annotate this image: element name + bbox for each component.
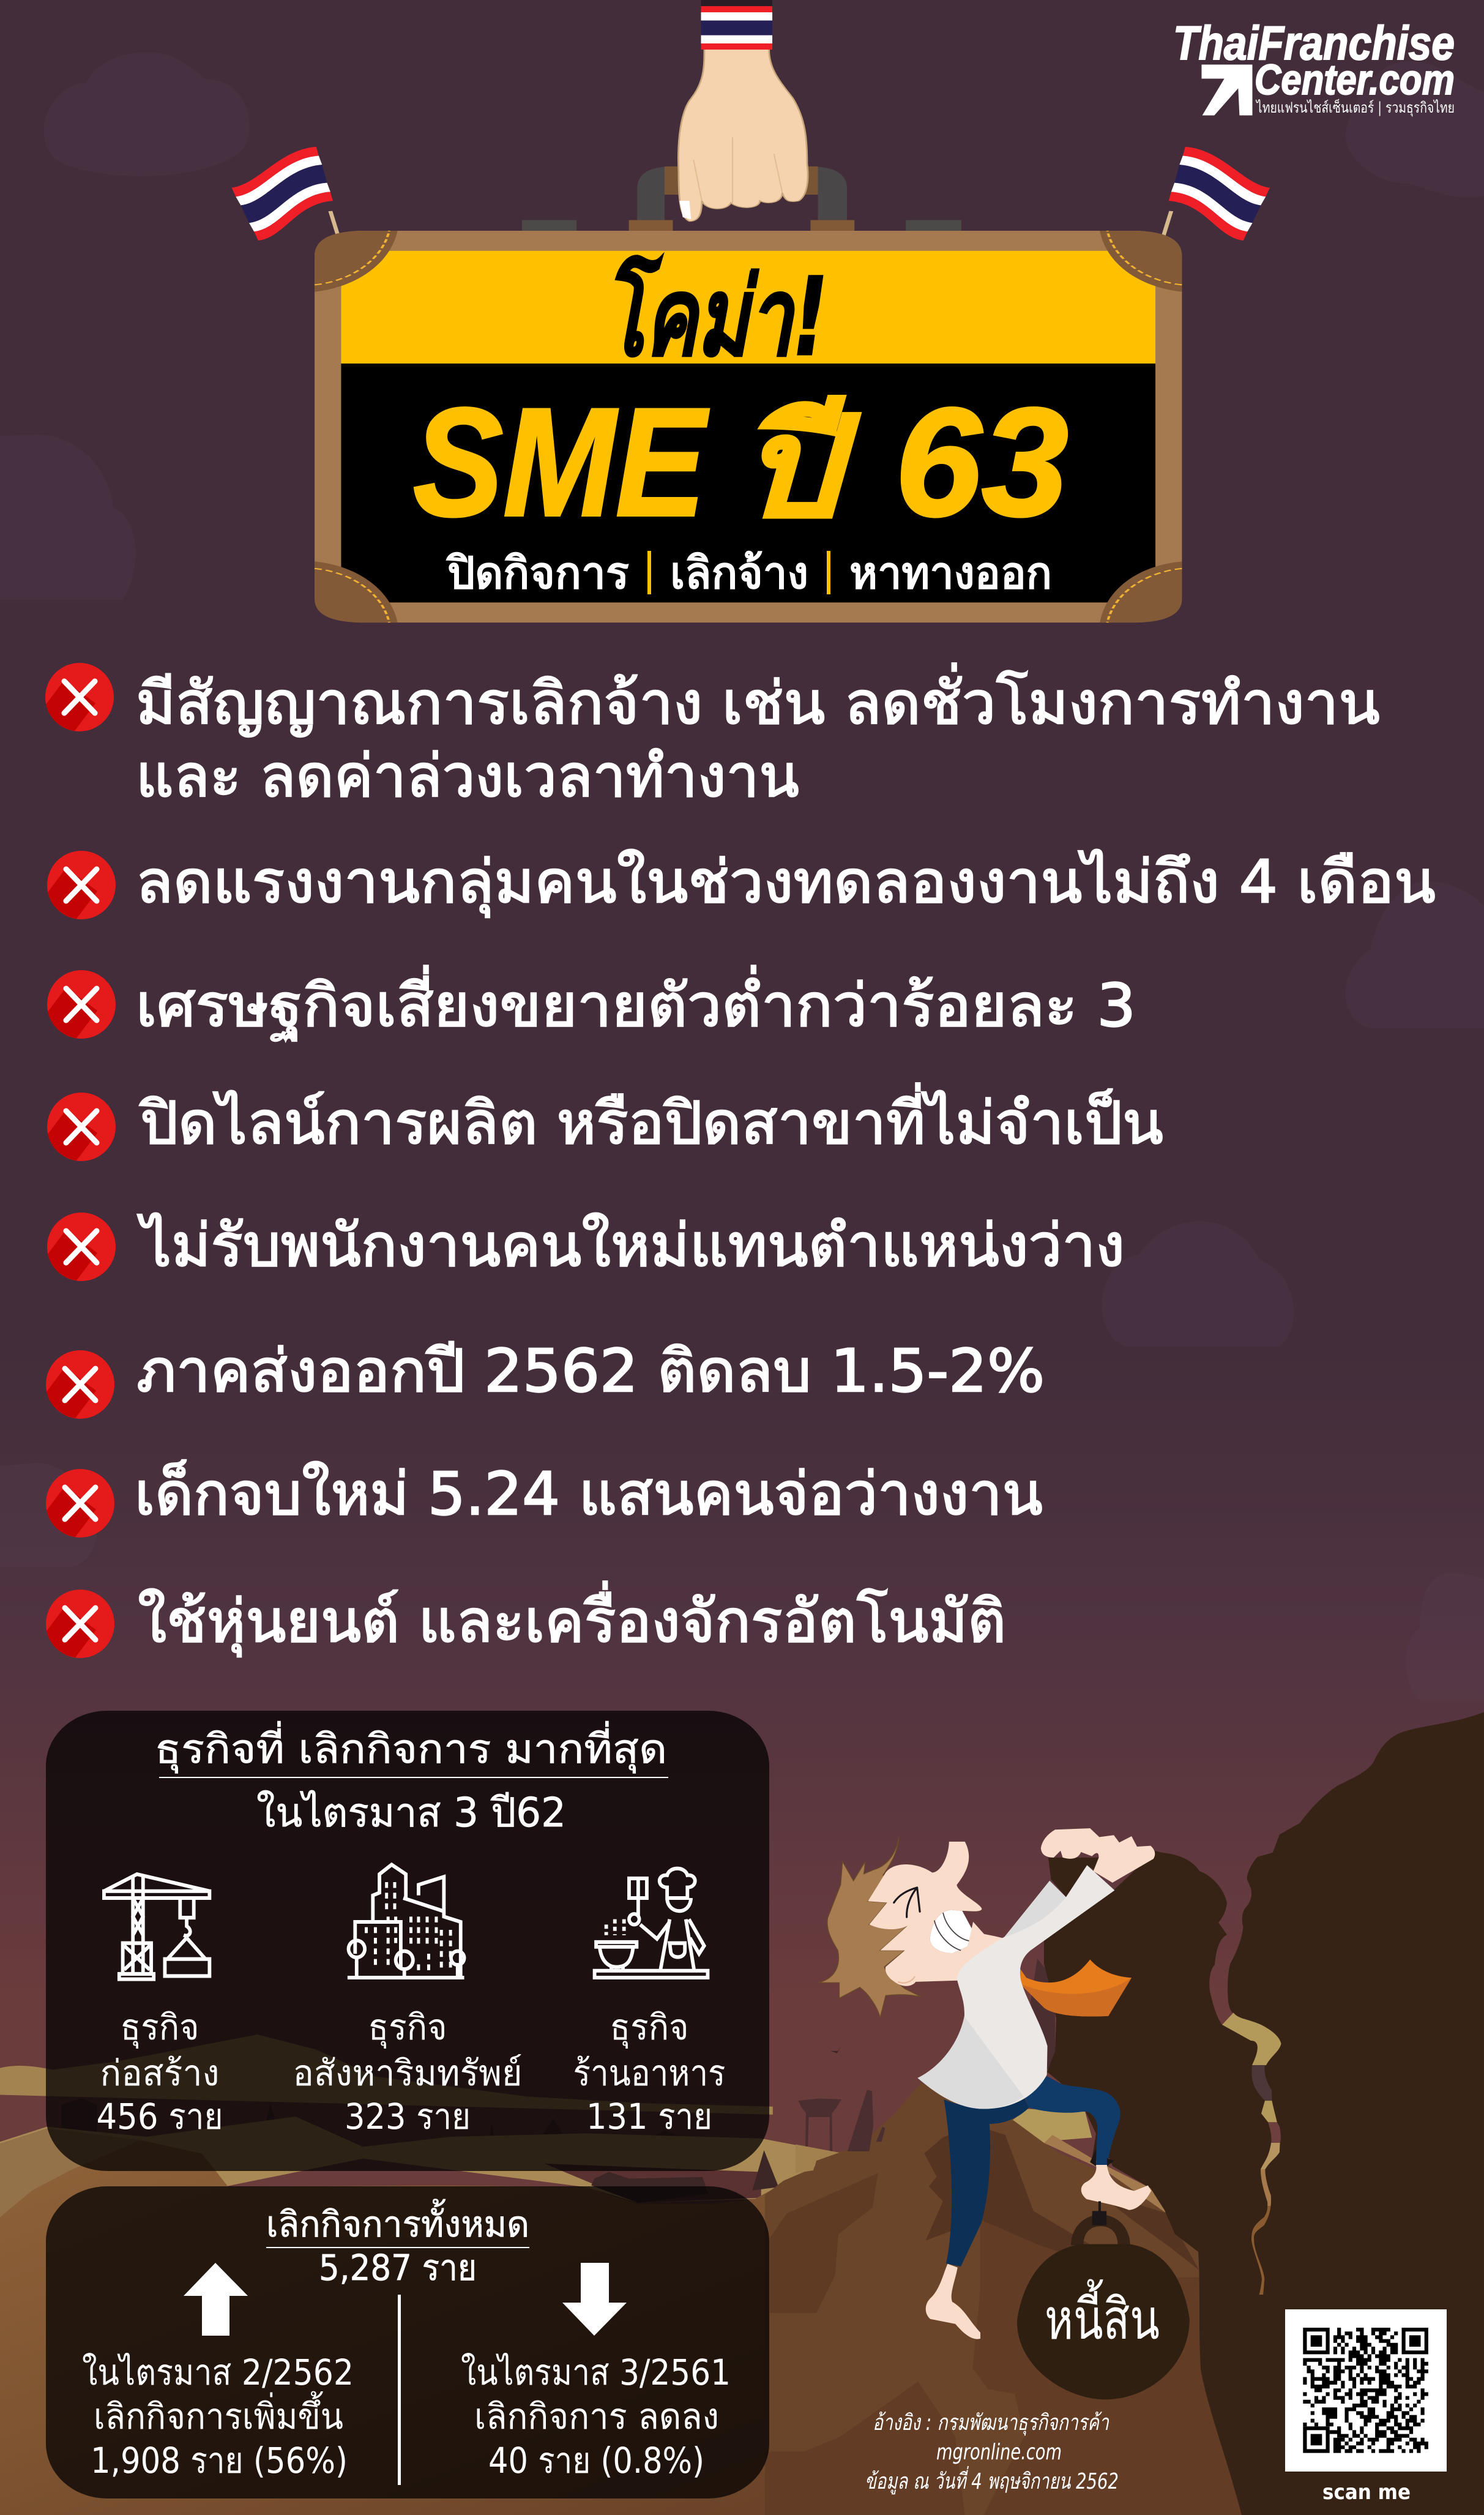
tan ledge: [796, 2145, 839, 2173]
quarter 2 figures: 1,908 ราย (56%): [91, 2440, 348, 2481]
arrow up: [184, 2263, 248, 2336]
icon: flag right: [1163, 147, 1270, 241]
panel heading: ธุรกิจที่ เลิกกิจการ มากที่สุด: [155, 1721, 667, 1774]
crack tail: [1249, 2289, 1264, 2315]
total heading: 5,287 ราย: [319, 2247, 477, 2289]
pocket temple: [591, 2150, 778, 2203]
suitcase subtitle: หาทางออก: [849, 547, 1052, 599]
shirt shading: [918, 1881, 1066, 2109]
suitcase headline: ปี: [740, 387, 860, 548]
landscape hills: [0, 2035, 960, 2515]
column: restaurants: 131 ราย: [586, 2096, 712, 2137]
item 5: ไม่รับพนักงานคนใหม่แทนตำแหน่งว่าง: [137, 1211, 1125, 1280]
item 2: ลดแรงงานกลุ่มคนในช่วงทดลองงานไม่ถึง 4 เดือน: [136, 848, 1436, 918]
hand holding suitcase: [678, 0, 808, 222]
upper foot: [1081, 2165, 1151, 2210]
item 1: และ ลดค่าล่วงเวลาทำงาน: [136, 742, 799, 810]
icon: red cross: [46, 1350, 114, 1419]
quarter 3 figures: [461, 2352, 731, 2481]
column: real estate: [293, 2006, 523, 2137]
right cliff: [1228, 1712, 1484, 2295]
quarter 3 figures: ในไตรมาส 3/2561: [461, 2352, 731, 2393]
item 8: ใช้หุ่นยนต์ และเครื่องจักรอัตโนมัติ: [138, 1581, 1006, 1657]
lower foot and debt weight: [926, 2201, 1190, 2399]
list: warning signs: [45, 663, 1436, 1658]
icon: red cross: [46, 1469, 114, 1538]
tan slope: [1044, 2135, 1166, 2213]
rock grip: [1048, 1858, 1099, 1897]
source citation: อ้างอิง : กรมพัฒนาธุรกิจการค้า: [873, 2410, 1109, 2436]
total heading: [266, 2199, 529, 2289]
column: restaurants: ร้านอาหาร: [573, 2052, 726, 2094]
item 1: มีสัญญาณการเลิกจ้าง เช่น ลดชั่วโมงการทำงาน: [136, 663, 1380, 738]
debt label: หนี้สิน: [1045, 2279, 1160, 2352]
olive sand: [0, 2128, 228, 2218]
suitcase headline: [413, 376, 1068, 548]
temple, ledge and tan slopes: [796, 1959, 1166, 2213]
suitcase headline: SME: [413, 376, 709, 548]
face: [868, 1842, 1003, 1986]
dark hump cliff: [1044, 1851, 1271, 2515]
tan patch: [1013, 2109, 1092, 2143]
icon: flag left: [232, 147, 338, 241]
front leg: [944, 2098, 1029, 2266]
column: real estate: 323 ราย: [345, 2096, 471, 2137]
quarter 3 figures: 40 ราย (0.8%): [488, 2440, 704, 2481]
item 3: เศรษฐกิจเสี่ยงขยายตัวต่ำกว่าร้อยละ 3: [136, 965, 1136, 1042]
quarter 2 figures: [82, 2352, 354, 2481]
finger lines: [693, 137, 782, 203]
sand hill: [0, 2117, 840, 2218]
item 4: ปิดไลน์การผลิต หรือปิดสาขาที่ไม่จำเป็น: [140, 1083, 1163, 1157]
icon: city buildings: [348, 1864, 464, 1978]
icon: crane: [104, 1874, 209, 1979]
logo: [1173, 16, 1455, 117]
bird: [830, 2045, 842, 2053]
icon: red cross: [47, 970, 116, 1039]
item 7: เด็กจบใหม่ 5.24 แสนคนจ่อว่างงาน: [135, 1459, 1043, 1528]
source citation: [865, 2410, 1119, 2495]
back leg: [1025, 2076, 1120, 2165]
right cliff base: [1248, 2295, 1484, 2515]
column: real estate: อสังหาริมทรัพย์: [293, 2052, 523, 2094]
quarter 2 figures: ในไตรมาส 2/2562: [82, 2352, 354, 2393]
source citation: mgronline.com: [936, 2440, 1062, 2465]
scene: cliff, mountain and climber: [765, 1712, 1484, 2515]
source citation: ข้อมูล ณ วันที่ 4 พฤษจิกายน 2562: [865, 2465, 1119, 2495]
quarter 3 figures: เลิกกิจการ ลดลง: [474, 2396, 719, 2437]
climber man: [819, 1828, 1155, 2266]
suitcase subtitle: เลิกจ้าง: [670, 547, 808, 599]
suitcase subtitle: ปิดกิจการ: [447, 547, 629, 599]
icon: red cross: [47, 1213, 116, 1281]
weight handle: [1071, 2214, 1130, 2246]
giant swing and spires: [798, 1959, 1055, 2152]
item 1: [45, 663, 1380, 810]
column: construction: [97, 2006, 223, 2137]
hand: [1041, 1828, 1155, 1883]
suitcase handle: [522, 166, 961, 231]
weight body: [1017, 2244, 1190, 2399]
column: real estate: ธุรกิจ: [368, 2006, 447, 2049]
hair: [819, 1837, 921, 2017]
cliff crack bands: [1222, 2012, 1286, 2295]
eye: [894, 1888, 920, 1917]
icon: red cross: [46, 1590, 114, 1658]
mountain facets: [765, 2130, 1252, 2515]
background clouds: [0, 52, 1484, 1702]
icon: chef: [595, 1869, 707, 1978]
temple silhouettes: [61, 2098, 778, 2199]
top scene: suitcase, hand and flags: [232, 0, 1270, 622]
valley pocket: [545, 2164, 761, 2203]
wristband: [701, 0, 772, 50]
sock shadow: [1090, 2148, 1114, 2166]
teeth lines: [934, 1913, 969, 1951]
arrow down: [562, 2263, 627, 2336]
QR code: [1285, 2309, 1447, 2472]
column: construction: ธุรกิจ: [120, 2006, 199, 2049]
column: restaurants: ธุรกิจ: [610, 2006, 689, 2049]
panel heading: [155, 1721, 668, 1836]
panel heading: ในไตรมาส 3 ปี62: [256, 1789, 566, 1836]
chin: [898, 1976, 915, 1983]
quarter 2 figures: เลิกกิจการเพิ่มขึ้น: [94, 2391, 343, 2437]
column: construction: 456 ราย: [97, 2096, 223, 2137]
distant hill: [0, 2035, 773, 2115]
column: construction: ก่อสร้าง: [100, 2052, 219, 2094]
panel: businesses closed by sector: [46, 1711, 769, 2171]
suitcase subtitle: [447, 547, 1052, 599]
icon: red cross: [47, 1093, 116, 1161]
panel: total closures: [46, 2186, 769, 2498]
column: restaurants: [573, 2006, 726, 2137]
lower foot: [926, 2264, 980, 2339]
foreground ground: [0, 2140, 960, 2515]
icon: red cross: [47, 851, 116, 919]
suitcase body: [315, 231, 1182, 622]
scarf: [1019, 1959, 1132, 2016]
mouth: [930, 1910, 972, 1953]
scan me label: scan me: [1322, 2480, 1411, 2505]
logo arrow: [1201, 64, 1253, 116]
mountain: [765, 2083, 1252, 2515]
suitcase title: โคม่า!: [603, 254, 828, 380]
logo: Center.com: [1255, 56, 1455, 103]
suitcase corners: [315, 231, 1182, 622]
suitcase headline: 63: [895, 376, 1068, 548]
shirt: [918, 1865, 1114, 2109]
weight clip: [1092, 2201, 1106, 2225]
total heading: เลิกกิจการทั้งหมด: [266, 2199, 529, 2245]
icon: red cross: [45, 663, 114, 731]
item 6: ภาคส่งออกปี 2562 ติดลบ 1.5-2%: [136, 1337, 1045, 1405]
